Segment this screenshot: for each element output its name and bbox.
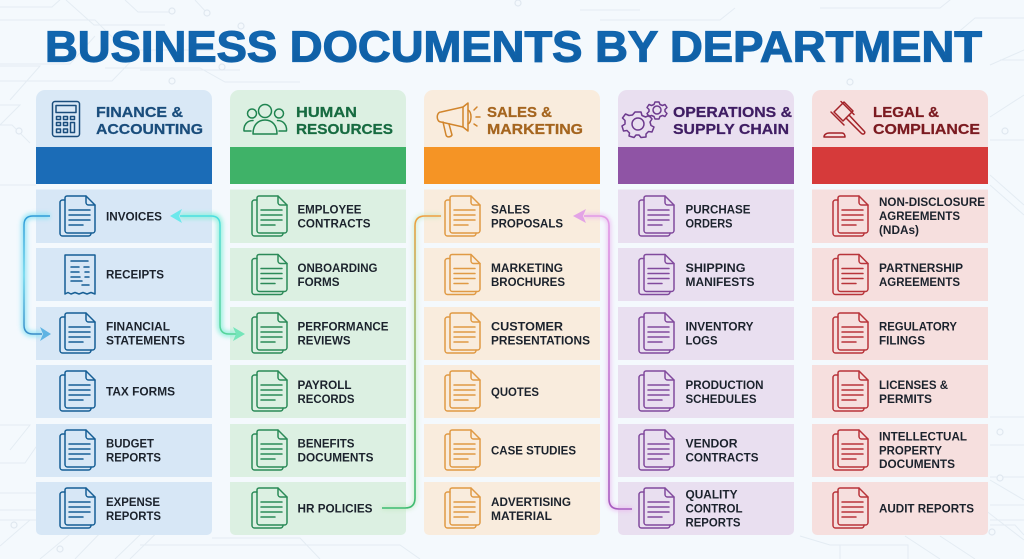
item: financial statements: STATEMENTS [106,334,185,348]
item: benefits documents: BENEFITS [298,436,354,450]
item: sales proposals: SALES [491,202,530,216]
icon: people [244,104,287,134]
item: performance reviews: REVIEWS [298,334,350,348]
item: budget reports: REPORTS [106,450,161,464]
item: employee contracts: EMPLOYEE [298,202,362,216]
item: sales proposals: PROPOSALS [491,216,563,230]
icon: gavel [824,102,865,137]
item: advertising material [424,482,600,535]
operations header [618,90,794,184]
item: advertising material: ADVERTISING [491,495,571,509]
icon: megaphone [437,103,480,137]
hr header: HUMAN [296,104,357,121]
item: expense reports: REPORTS [106,509,161,523]
item: regulatory filings: FILINGS [879,334,925,348]
item: audit reports: AUDIT REPORTS [879,502,974,516]
item: purchase orders [618,190,794,243]
item: onboarding forms: FORMS [298,275,340,289]
item: quality control reports: QUALITY [686,488,738,502]
item: licenses and permits: PERMITS [879,392,932,406]
item: vendor contracts [618,424,794,477]
arrow: performance reviews to invoices [170,209,245,341]
item: intellectual property documents: DOCUMENTS [879,457,955,471]
item: shipping manifests: SHIPPING [686,261,746,275]
icon: gears [622,102,667,138]
item: intellectual property documents [812,424,988,477]
item: quotes [424,365,600,418]
item: non-disclosure agreements: (NDAs) [879,223,919,237]
item: hr policies [230,482,406,535]
item: shipping manifests: MANIFESTS [686,275,754,289]
title: BUSINESS DOCUMENTS BY DEPARTMENT [45,22,982,72]
item: regulatory filings: REGULATORY [879,320,957,334]
sales header: SALES & [487,104,552,121]
item: purchase orders: ORDERS [686,216,732,230]
sales header: MARKETING [487,121,583,138]
item: expense reports [36,482,212,535]
operations header: SUPPLY CHAIN [673,121,789,138]
item: case studies: CASE STUDIES [491,444,576,458]
item: sales proposals [424,190,600,243]
item: non-disclosure agreements: AGREEMENTS [879,209,960,223]
hr header: RESOURCES [296,121,393,138]
item: customer presentations [424,307,600,360]
legal header [812,90,988,184]
item: partnership agreements: AGREEMENTS [879,275,960,289]
item: partnership agreements [812,248,988,301]
item: quality control reports [618,482,794,535]
item: production schedules: SCHEDULES [686,392,756,406]
item: employee contracts: CONTRACTS [298,216,370,230]
arrow: hr policies to sales proposals [382,216,441,508]
legal header: LEGAL & [873,104,939,121]
item: benefits documents: DOCUMENTS [298,450,374,464]
item: audit reports [812,482,988,535]
icon: calculator [52,102,80,136]
operations header: OPERATIONS & [673,104,792,121]
item: marketing brochures [424,248,600,301]
hr header [230,90,406,184]
item: intellectual property documents: PROPERTY [879,444,942,458]
item: hr policies: HR POLICIES [298,502,372,516]
item: vendor contracts: CONTRACTS [686,450,758,464]
item: purchase orders: PURCHASE [686,202,750,216]
item: invoices [36,190,212,243]
finance header: FINANCE & [96,104,183,121]
item: receipts: RECEIPTS [106,268,164,282]
item: non-disclosure agreements: NON-DISCLOSURE [879,195,985,209]
item: licenses and permits: LICENSES & [879,378,948,392]
item: payroll records: PAYROLL [298,378,352,392]
item: inventory logs [618,307,794,360]
item: customer presentations: PRESENTATIONS [491,334,590,348]
item: quality control reports: CONTROL [686,502,742,516]
finance header: ACCOUNTING [96,121,203,138]
item: quotes: QUOTES [491,385,539,399]
item: onboarding forms: ONBOARDING [298,261,378,275]
item: benefits documents [230,424,406,477]
item: vendor contracts: VENDOR [686,436,738,450]
item: onboarding forms [230,248,406,301]
item: shipping manifests [618,248,794,301]
item: tax forms [36,365,212,418]
panel: finance and accounting [36,90,212,535]
item: performance reviews [230,307,406,360]
arrow: quality control reports to sales proposals [573,209,632,509]
item: partnership agreements: PARTNERSHIP [879,261,963,275]
item: licenses and permits [812,365,988,418]
item: production schedules: PRODUCTION [686,378,764,392]
item: tax forms: TAX FORMS [106,384,175,398]
item: case studies [424,424,600,477]
item: inventory logs: LOGS [686,334,718,348]
item: intellectual property documents: INTELLECTUAL [879,430,967,444]
item: quality control reports: REPORTS [686,516,740,530]
panel: sales and marketing [424,90,600,535]
item: regulatory filings [812,307,988,360]
item: performance reviews: PERFORMANCE [298,320,388,334]
sales header [424,90,600,184]
item: financial statements: FINANCIAL [106,320,170,334]
legal header: COMPLIANCE [873,121,980,138]
item: inventory logs: INVENTORY [686,320,754,334]
item: marketing brochures: BROCHURES [491,275,565,289]
item: budget reports [36,424,212,477]
panel: human resources [230,90,406,535]
item: expense reports: EXPENSE [106,495,160,509]
panel: legal and compliance [812,90,988,535]
item: advertising material: MATERIAL [491,509,552,523]
finance header [36,90,212,184]
panel: operations and supply chain [618,90,794,535]
item: payroll records: RECORDS [298,392,354,406]
item: non-disclosure agreements [812,190,988,243]
item: production schedules [618,365,794,418]
item: receipts [36,248,212,301]
item: customer presentations: CUSTOMER [491,320,563,334]
item: financial statements [36,307,212,360]
item: marketing brochures: MARKETING [491,261,563,275]
item: budget reports: BUDGET [106,436,155,450]
item: invoices: INVOICES [106,210,162,224]
item: employee contracts [230,190,406,243]
item: payroll records [230,365,406,418]
arrow: invoices to financial statements [24,216,51,341]
